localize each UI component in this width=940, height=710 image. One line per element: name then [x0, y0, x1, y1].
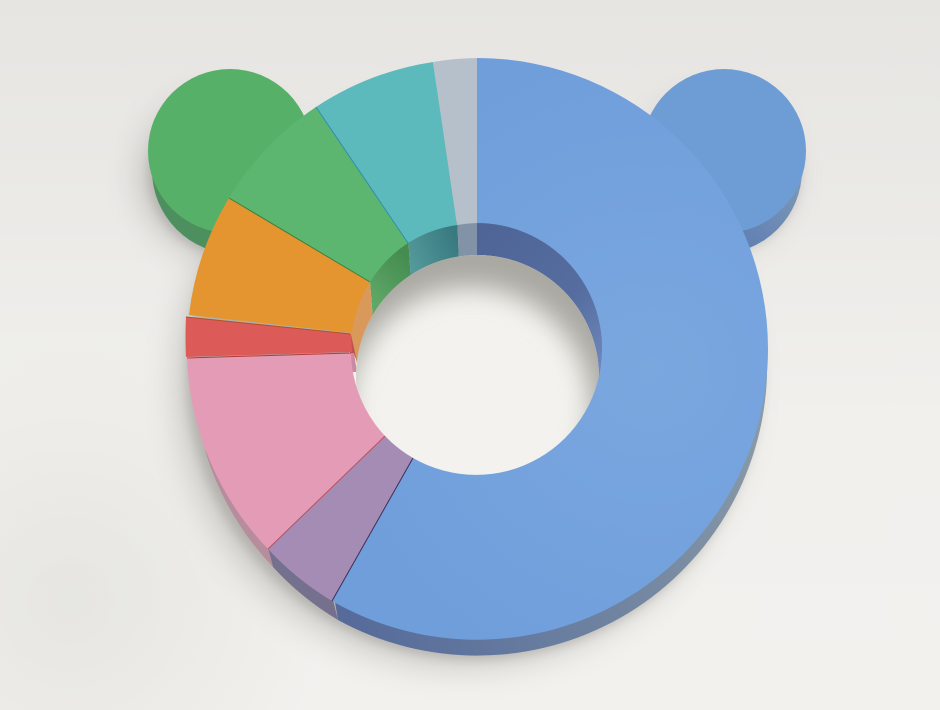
hole wall: green [370, 242, 410, 315]
segment: green [229, 107, 408, 282]
segment: gray [433, 58, 477, 225]
segment: orange [189, 198, 370, 333]
hole wall: gray [458, 223, 477, 256]
blue ear side wall [634, 86, 802, 254]
left ear: green [148, 69, 320, 254]
ear side wall [152, 86, 320, 254]
purple outer wall [268, 548, 338, 620]
segment: teal [316, 62, 457, 243]
blue ear top face [642, 69, 806, 233]
segment separator lines [186, 107, 413, 601]
outer side wall of donut [205, 300, 767, 656]
hole wall: teal [408, 222, 459, 275]
ear top face [148, 69, 312, 233]
pink outer wall [205, 450, 273, 567]
hole wall: orange [350, 282, 373, 364]
floor [356, 255, 599, 428]
hole wall: blue [477, 223, 602, 376]
blue outer wall [333, 300, 767, 656]
hole: inner walls and floor [350, 222, 602, 428]
segment: pink [187, 353, 385, 549]
soft drop shadow [138, 96, 792, 668]
segment: red [186, 317, 352, 357]
segment: purple [268, 436, 413, 601]
hole wall: red [350, 334, 357, 362]
hole base fill [349, 222, 605, 478]
hole wall: pink [351, 353, 356, 372]
right ear: blue [634, 69, 806, 254]
contact shadow [148, 84, 800, 660]
donut top surface segments [186, 58, 768, 640]
segment: large blue [332, 58, 768, 640]
